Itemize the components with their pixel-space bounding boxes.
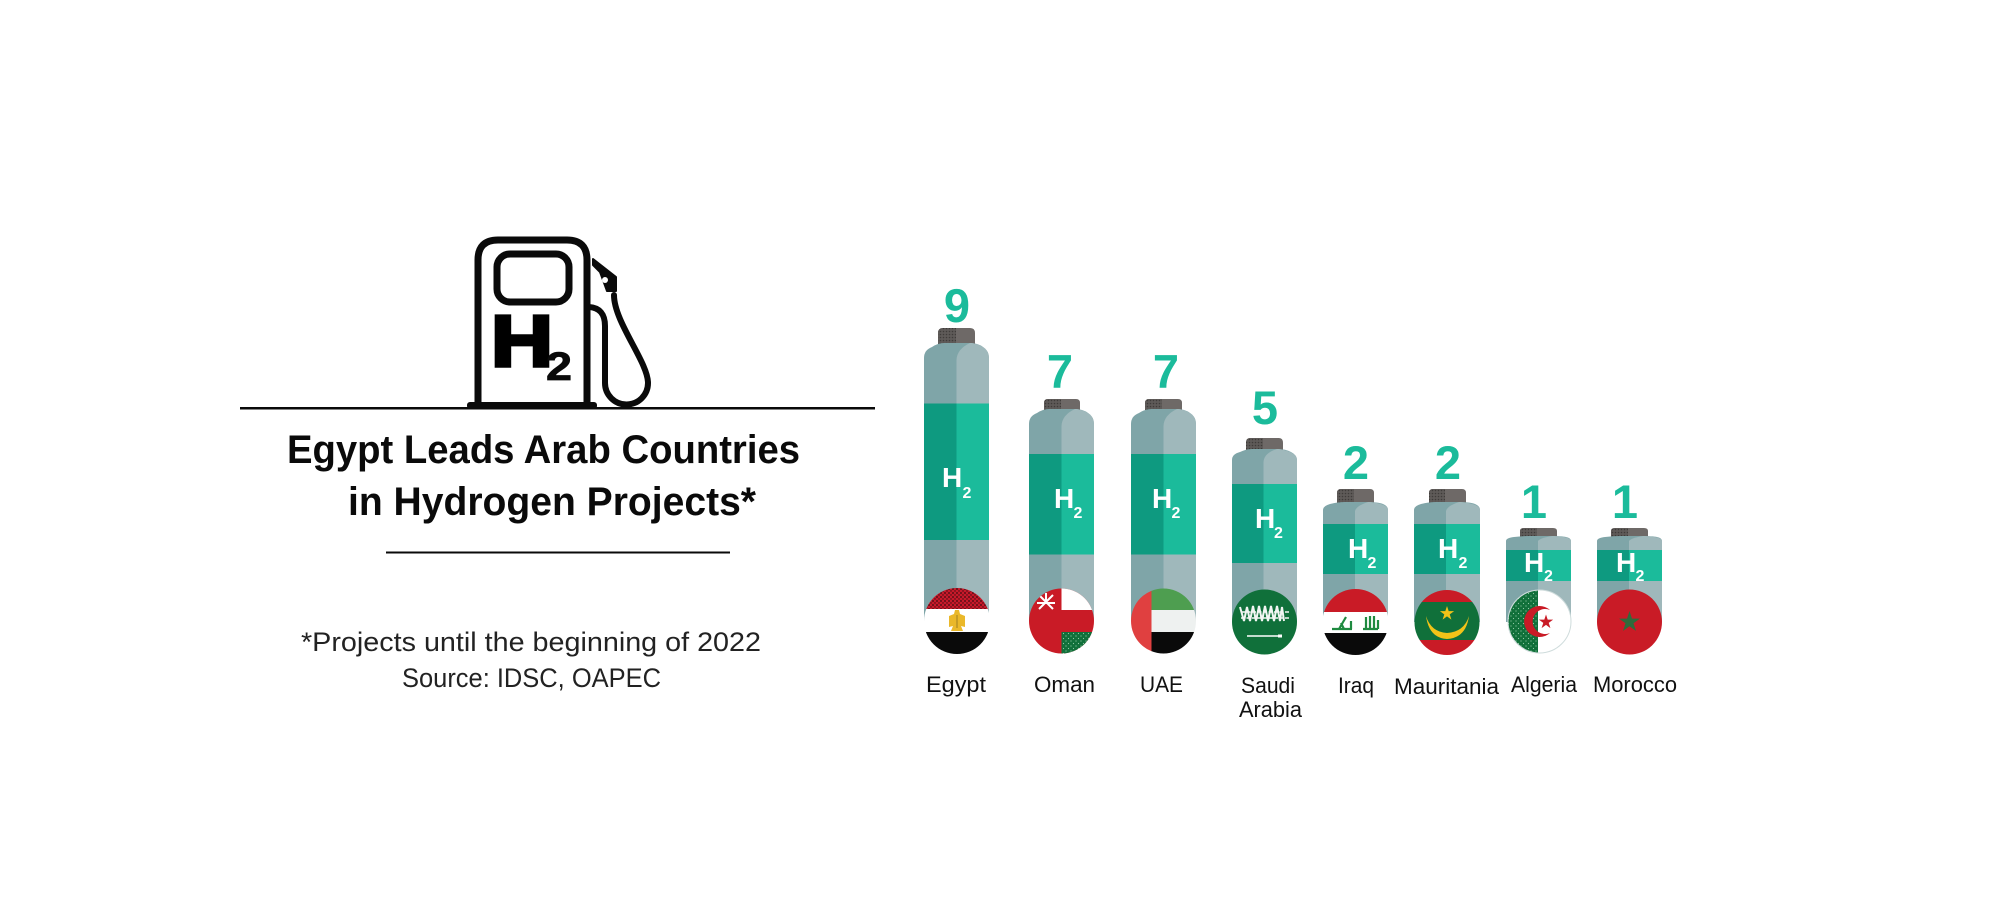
- cylinder: Saudi Arabia, 5: Saudi: [1241, 673, 1295, 698]
- cylinder: Saudi Arabia, 5: Arabia: [1239, 697, 1303, 722]
- cylinder: Mauritania, 2: 2: [1435, 436, 1461, 489]
- cylinder: Egypt, 9: Egypt: [926, 672, 986, 697]
- cylinder: Oman, 7: 2: [1074, 505, 1082, 522]
- cylinder: Saudi Arabia, 5: 5: [1252, 381, 1278, 434]
- cylinder: Egypt, 9: [924, 279, 990, 697]
- cylinder: UAE, 7: [1130, 345, 1197, 697]
- cylinder: UAE, 7: 2: [1172, 505, 1180, 522]
- title: [287, 428, 800, 524]
- cylinder: Iraq, 2: 2: [1368, 555, 1376, 572]
- cylinder: UAE, 7: 7: [1153, 345, 1179, 398]
- flag: Saudi Arabia: [1232, 590, 1297, 654]
- flag: Iraq: [1322, 588, 1389, 656]
- title: Egypt Leads Arab Countries: [287, 428, 800, 472]
- cylinder: Mauritania, 2: Mauritania: [1394, 674, 1500, 699]
- cylinder: UAE, 7: H: [1152, 483, 1172, 514]
- flag: Egypt: [924, 588, 990, 654]
- footnote and source: Source: IDSC, OAPEC: [402, 663, 661, 693]
- cylinder: Morocco, 1: [1593, 475, 1677, 697]
- cylinder: Algeria, 1: [1506, 475, 1578, 697]
- cylinder: Morocco, 1: 2: [1636, 568, 1644, 585]
- cylinder: Oman, 7: 7: [1047, 345, 1073, 398]
- footnote and source: [301, 627, 761, 693]
- flag: Oman: [1029, 588, 1095, 654]
- icon: hydrogen fuel pump: 2: [546, 345, 572, 389]
- cylinder: Mauritania, 2: [1394, 436, 1500, 699]
- cylinder: Mauritania, 2: 2: [1458, 555, 1468, 572]
- title: in Hydrogen Projects*: [348, 480, 756, 524]
- cylinder: Oman, 7: Oman: [1034, 672, 1095, 697]
- horizontal rule under pump: [240, 407, 875, 410]
- cylinder: Saudi Arabia, 5: H: [1255, 503, 1275, 534]
- cylinder: Algeria, 1: H: [1524, 547, 1544, 578]
- rule under title: [386, 552, 730, 554]
- cylinder: Algeria, 1: Algeria: [1511, 672, 1578, 697]
- cylinder: Iraq, 2: H: [1348, 533, 1368, 564]
- flag: Algeria: [1507, 590, 1571, 654]
- cylinder: Mauritania, 2: H: [1438, 533, 1458, 564]
- cylinder: UAE, 7: UAE: [1140, 672, 1183, 697]
- cylinder: Iraq, 2: Iraq: [1338, 673, 1374, 698]
- cylinder: Egypt, 9: 2: [962, 485, 972, 502]
- cylinder: Saudi Arabia, 5: 2: [1274, 525, 1283, 542]
- flag: Mauritania: [1413, 589, 1481, 655]
- footnote and source: *Projects until the beginning of 2022: [301, 627, 761, 657]
- cylinder: Egypt, 9: 9: [944, 279, 970, 332]
- cylinder: Saudi Arabia, 5: [1232, 381, 1303, 722]
- cylinder: Morocco, 1: 1: [1612, 475, 1638, 528]
- cylinder: Oman, 7: [1029, 345, 1095, 697]
- cylinder: Morocco, 1: H: [1616, 547, 1636, 578]
- cylinder: Oman, 7: H: [1054, 483, 1074, 514]
- cylinder: Algeria, 1: 2: [1544, 568, 1553, 585]
- cylinder: Iraq, 2: [1322, 436, 1389, 698]
- icon: hydrogen fuel pump: [467, 240, 648, 409]
- cylinder: Morocco, 1: Morocco: [1593, 672, 1677, 697]
- flag: UAE: [1130, 588, 1197, 654]
- icon: hydrogen fuel pump: H: [491, 302, 553, 382]
- cylinder: Algeria, 1: 1: [1521, 475, 1547, 528]
- chart: cylinders by country: [924, 279, 1677, 722]
- cylinder: Egypt, 9: H: [942, 462, 962, 493]
- cylinder: Iraq, 2: 2: [1343, 436, 1369, 489]
- flag: Morocco: [1597, 590, 1662, 654]
